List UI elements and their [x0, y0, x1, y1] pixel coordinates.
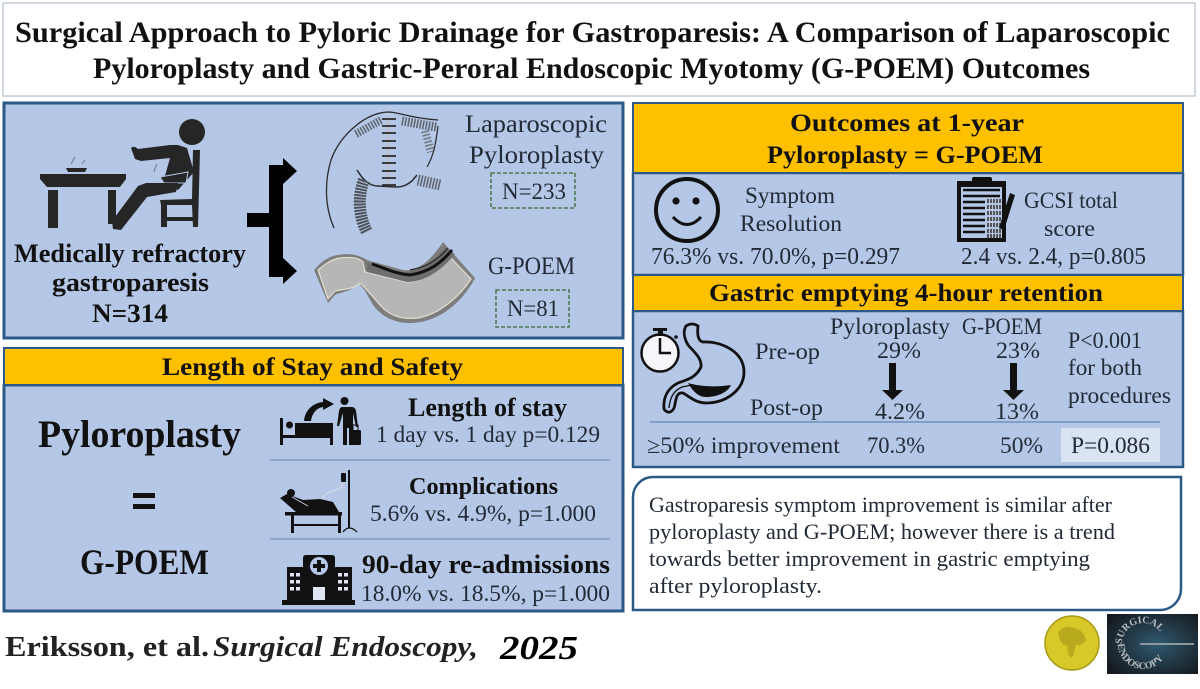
citation: Eriksson, et al.	[5, 632, 209, 663]
text: complications: Complications	[409, 474, 558, 500]
text: complications: 5.6% vs. 4.9%, p=1.000	[370, 501, 596, 526]
citation	[5, 630, 578, 667]
title: Surgical Approach to Pyloric Drainage for Gastroparesis: A Comparison of Laparoscopic	[15, 16, 1170, 49]
icon: hospital	[282, 555, 355, 605]
table: pre-op and post-op retention: Pyloroplasty	[830, 314, 951, 339]
text: p value both procedures: P<0.001	[1068, 328, 1142, 353]
text: 90-day re-admissions	[361, 550, 610, 606]
callout: conclusion: after pyloroplasty.	[649, 573, 822, 598]
table: pre-op and post-op retention: 23%	[996, 338, 1040, 363]
icon: smiley	[656, 179, 718, 241]
illustration: G-POEM endoscope	[314, 242, 475, 323]
callout: conclusion: Gastroparesis symptom improvement is similar after	[649, 492, 1113, 517]
icon: discharge from bed	[280, 397, 361, 445]
table: pre-op and post-op retention	[750, 314, 1042, 424]
table: pre-op and post-op retention: 4.2%	[875, 399, 925, 424]
text: GCSI total score: score	[1044, 216, 1095, 241]
text: 90-day re-admissions: 90-day re-admissions	[362, 550, 610, 579]
callout: conclusion: pyloroplasty and G-POEM; however there is a trend	[649, 519, 1115, 544]
text: laparoscopic pyloroplasty: Pyloroplasty	[469, 142, 605, 169]
text: symptom resolution	[651, 183, 900, 270]
heading: gastric emptying: Gastric emptying 4-hour retention	[709, 280, 1103, 307]
panel: outcomes at 1-year	[633, 103, 1183, 275]
heading: outcomes at 1-year	[633, 103, 1183, 173]
row: at least 50 percent improvement: P=0.086	[1071, 433, 1150, 458]
arrow: G-POEM reduction	[1003, 363, 1024, 400]
citation: Surgical Endoscopy,	[213, 632, 478, 663]
row: at least 50 percent improvement: 70.3%	[867, 433, 925, 458]
heading: length of stay and safety: Length of Stay and Safety	[162, 354, 464, 381]
row: at least 50 percent improvement	[647, 428, 1160, 462]
text: complications	[370, 474, 596, 526]
table: pre-op and post-op retention: Post-op	[750, 395, 823, 420]
text: GCSI total score	[961, 188, 1146, 270]
callout: conclusion	[633, 477, 1181, 610]
badge: N=233: N=233	[502, 179, 566, 204]
text: p value both procedures	[1068, 328, 1171, 408]
title	[3, 3, 1195, 96]
heading: outcomes at 1-year: Pyloroplasty = G-POEM	[767, 142, 1043, 169]
logo: surgical endoscopy journal: SURGICAL	[1116, 616, 1163, 644]
text: G-POEM: G-POEM	[488, 253, 575, 280]
icon: patient at table holding stomach	[40, 119, 205, 230]
text: medically refractory gastroparesis: gastroparesis	[52, 268, 209, 297]
text: symptom resolution: Resolution	[740, 211, 843, 236]
text: laparoscopic pyloroplasty	[465, 111, 607, 169]
text: symptom resolution: Symptom	[745, 183, 835, 208]
logo: surgical endoscopy journal	[1107, 614, 1198, 674]
logo: gold society medal	[1045, 616, 1099, 670]
badge: N=81	[496, 290, 569, 327]
text: length of stay: 1 day vs. 1 day p=0.129	[376, 422, 600, 447]
text: length of stay: Length of stay	[408, 393, 567, 422]
callout: conclusion: towards better improvement in gastric emptying	[649, 546, 1090, 571]
heading: outcomes at 1-year: Outcomes at 1-year	[790, 110, 1024, 137]
table: pre-op and post-op retention: G-POEM	[962, 314, 1042, 339]
icon: patient on IV drip	[280, 470, 357, 533]
panel: patient population	[4, 103, 623, 338]
arrow: pyloroplasty reduction	[882, 363, 903, 400]
table: pre-op and post-op retention: Pre-op	[755, 339, 820, 364]
arrow: split to two procedures	[247, 158, 297, 284]
logo: surgical endoscopy journal: ENDOSCOPY	[1118, 643, 1162, 670]
title: Pyloroplasty and Gastric-Peroral Endoscopic Myotomy (G-POEM) Outcomes	[93, 52, 1090, 85]
citation: 2025	[499, 630, 578, 667]
text: symptom resolution: 76.3% vs. 70.0%, p=0.297	[651, 244, 900, 270]
text: 90-day re-admissions: 18.0% vs. 18.5%, p=1.000	[361, 581, 610, 606]
row: at least 50 percent improvement: 50%	[1000, 433, 1043, 458]
text: pyloroplasty equals G-POEM	[38, 413, 241, 582]
badge: N=81: N=81	[507, 296, 559, 321]
illustration: pyloroplasty	[326, 112, 440, 232]
panel: gastric emptying 4-hour retention	[633, 275, 1183, 467]
text: pyloroplasty equals G-POEM: G-POEM	[80, 542, 209, 582]
row: at least 50 percent improvement: ≥50% improvement	[647, 433, 841, 458]
badge: N=233	[491, 173, 575, 208]
heading: gastric emptying	[633, 275, 1183, 311]
text: medically refractory gastroparesis: Medically refractory	[14, 239, 246, 268]
panel: length of stay and safety	[4, 348, 623, 611]
text: medically refractory gastroparesis: N=314	[92, 299, 168, 328]
table: pre-op and post-op retention: 13%	[995, 399, 1039, 424]
text: GCSI total score: GCSI total	[1024, 188, 1118, 213]
text: medically refractory gastroparesis	[14, 239, 246, 328]
icon: clipboard	[957, 177, 1015, 242]
heading: length of stay and safety	[4, 348, 623, 385]
text: length of stay	[376, 393, 600, 447]
text: laparoscopic pyloroplasty: Laparoscopic	[465, 111, 607, 138]
icon: stopwatch	[642, 328, 678, 372]
text: p value both procedures: procedures	[1068, 383, 1171, 408]
text: p value both procedures: for both	[1068, 355, 1142, 380]
icon: stomach with retained contents	[664, 324, 744, 412]
table: pre-op and post-op retention: 29%	[877, 338, 921, 363]
text: pyloroplasty equals G-POEM: Pyloroplasty	[38, 413, 241, 456]
text: GCSI total score: 2.4 vs. 2.4, p=0.805	[961, 244, 1146, 270]
